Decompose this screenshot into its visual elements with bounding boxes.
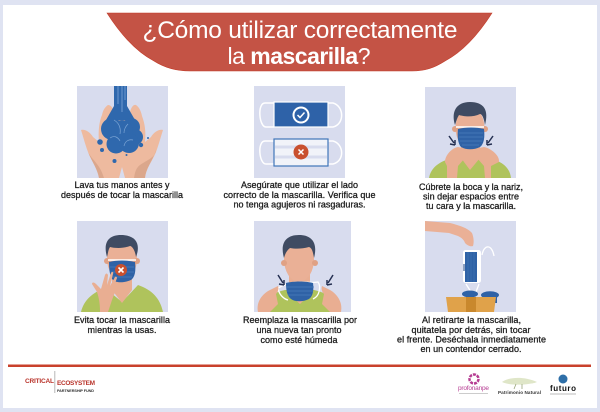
caption: cover mouth: sin dejar espacios entre <box>423 192 519 202</box>
title banner <box>107 13 492 71</box>
caption: check mask: correcto de la mascarilla. Verifica que <box>224 190 376 200</box>
caption: wash hands: Lava tus manos antes y <box>74 180 170 190</box>
logo: Patrimonio Natural <box>498 378 541 395</box>
logo: Futuro: futuro <box>550 384 576 393</box>
panel: check mask <box>254 86 345 178</box>
logo: Profonanpe: profonanpe <box>458 385 489 392</box>
panel: replace mask <box>254 221 351 312</box>
logo: Critical Ecosystem Partnership Fund: PARTNERSHIP FUND <box>57 389 94 393</box>
icon: arrow right <box>327 275 333 285</box>
title: la mascarilla? <box>228 43 370 69</box>
title: ¿Cómo utilizar correctamente <box>142 17 458 44</box>
panel: avoid touching <box>77 221 168 312</box>
logo: Critical Ecosystem Partnership Fund: CRITICAL <box>25 378 54 385</box>
icon: person replacing mask <box>258 235 341 312</box>
caption: remove mask: en un contendor cerrado. <box>420 344 522 354</box>
icon: person wearing mask <box>81 235 163 312</box>
logo: Futuro <box>550 374 576 394</box>
caption: cover mouth: Cúbrete la boca y la nariz, <box>419 182 523 192</box>
panel: wash hands <box>77 86 168 178</box>
icon: arm holding mask <box>425 221 474 246</box>
caption: check mask: Asegúrate que utilizar el lado <box>241 180 358 190</box>
caption: replace mask: una nueva tan pronto <box>256 325 342 335</box>
icon: falling mask <box>463 247 494 292</box>
caption: avoid touching: mientras la usas. <box>88 325 156 335</box>
caption: remove mask: Al retirarte la mascarilla, <box>422 315 521 325</box>
logo: Patrimonio Natural: Patrimonio Natural <box>498 390 541 395</box>
caption: cover mouth: tu cara y la mascarilla. <box>426 201 516 211</box>
logo: Critical Ecosystem Partnership Fund: ECOSYSTEM <box>57 380 95 387</box>
caption: wash hands: después de tocar la mascarilla <box>61 190 183 200</box>
icon: raised hand <box>92 272 118 312</box>
footer divider <box>8 364 591 367</box>
caption: replace mask: como esté húmeda <box>260 335 338 345</box>
icon: hands <box>81 105 163 178</box>
panel: cover mouth <box>425 87 516 178</box>
caption: remove mask: el frente. Deséchala inmediatamente <box>397 334 546 344</box>
caption: remove mask: quitatela por detrás, sin tocar <box>412 325 530 335</box>
icon: arrow right <box>487 136 493 145</box>
panel: remove mask <box>425 221 516 312</box>
logo: Profonanpe <box>458 374 489 394</box>
icon: arrow left <box>449 136 455 145</box>
caption: check mask: no tenga agujeros ni rasgaduras. <box>234 200 366 210</box>
icon: correct side mask <box>260 102 342 127</box>
icon: box <box>446 297 496 312</box>
icon: person fitting mask <box>429 102 511 178</box>
icon: discarded masks <box>462 290 499 303</box>
icon: water and foam <box>97 86 149 163</box>
icon: wrong side mask <box>260 139 342 166</box>
caption: replace mask: Reemplaza la mascarilla por <box>243 315 357 325</box>
logo: Critical Ecosystem Partnership Fund <box>25 371 95 393</box>
caption: avoid touching: Evita tocar la mascarilla <box>74 315 170 325</box>
icon: arrow left <box>278 275 284 285</box>
